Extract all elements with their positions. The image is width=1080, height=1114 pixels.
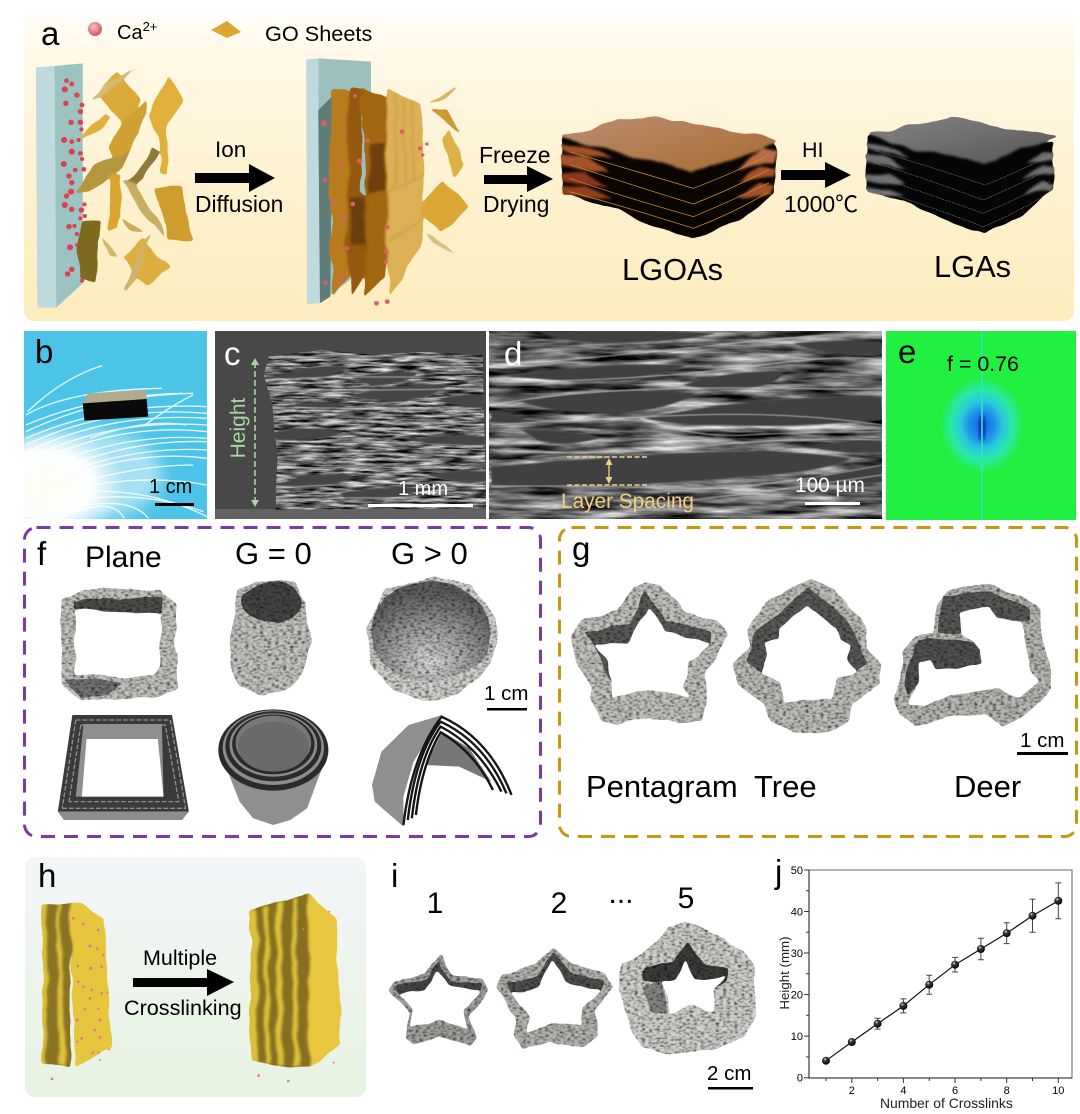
y tick labels: 0	[797, 1073, 803, 1085]
label g: g	[572, 530, 590, 567]
label Ion: Ion	[215, 137, 246, 162]
label LGAs: LGAs	[934, 249, 1011, 284]
y tick labels: 20	[791, 990, 803, 1002]
stack after crosslinking	[249, 893, 342, 1082]
FFT streak	[981, 331, 983, 520]
panel h: multiple crosslinking	[25, 857, 366, 1097]
label HI: HI	[802, 138, 824, 162]
panel i: stars after crosslink cycles	[388, 857, 755, 1090]
y tick labels: 50	[791, 865, 803, 877]
legend: calcium ion	[88, 19, 157, 44]
panel a background	[24, 10, 1074, 321]
label b: b	[35, 333, 53, 370]
scale text 1 cm: 1 cm	[1020, 729, 1064, 752]
label f value: f = 0.76	[947, 352, 1019, 376]
label ellipsis: ...	[608, 877, 634, 910]
sky background	[24, 331, 207, 519]
SEM background	[215, 331, 486, 519]
photo: pentagram ring	[570, 582, 727, 723]
label Freeze: Freeze	[479, 142, 551, 168]
stack: LGOAs	[559, 116, 778, 239]
scale bar	[368, 504, 473, 507]
arrow: ion diffusion	[195, 164, 275, 192]
x axis title: Number of Crosslinks	[880, 1095, 1013, 1111]
photo: tree ring	[734, 580, 881, 732]
label 1000 C: 1000℃	[784, 191, 858, 217]
photo: star after 5 cycles	[617, 923, 755, 1055]
label Pentagram: Pentagram	[586, 769, 738, 804]
panel e: FFT orientation map	[886, 331, 1076, 520]
height arrow	[251, 358, 259, 507]
legend: calcium ion: 2+	[143, 19, 157, 34]
label 2: 2	[551, 887, 567, 920]
label c: c	[224, 335, 240, 372]
FFT green field	[886, 331, 1076, 520]
label Drying: Drying	[483, 191, 549, 217]
panel f: shapes of different curvature	[24, 528, 540, 836]
legend: GO sheet: GO Sheets	[265, 21, 372, 46]
label 5: 5	[678, 882, 694, 915]
label Crosslinking: Crosslinking	[124, 995, 242, 1020]
diagram: ions crosslinking GO sheets on the wall	[306, 58, 468, 306]
scale text 100 um: 100 µm	[795, 474, 865, 497]
label G = 0: G = 0	[235, 536, 312, 571]
panel j: height vs crosslinks chart	[774, 853, 1072, 1111]
label 1: 1	[427, 887, 443, 920]
panel c: SEM cross section	[215, 331, 490, 519]
diagram: wall with free ions and GO sheets	[36, 63, 192, 308]
model: cylinder	[218, 709, 328, 825]
scale text 1 cm: 1 cm	[484, 682, 528, 705]
scale text 1 cm: 1 cm	[149, 476, 192, 498]
dashed frame	[24, 528, 540, 836]
scale bar	[155, 503, 194, 506]
legend: GO sheet	[211, 21, 372, 46]
panel g: complex outlines	[560, 528, 1076, 836]
label i: i	[391, 857, 398, 894]
axes and ticks	[804, 870, 1072, 1083]
y axis title: Height (mm)	[777, 936, 792, 1010]
data line	[826, 901, 1058, 1061]
y tick labels: 30	[791, 948, 803, 960]
x tick labels: 4	[900, 1085, 906, 1097]
label G > 0: G > 0	[391, 536, 468, 571]
label e: e	[898, 333, 916, 370]
label LGOAs: LGOAs	[622, 252, 723, 287]
model: bowl	[372, 715, 511, 827]
label a: a	[41, 15, 60, 52]
photo: square frame	[61, 588, 177, 700]
arrow: HI 1000 C	[781, 162, 851, 188]
FFT halo	[940, 377, 1024, 473]
photo: deer ring	[895, 583, 1052, 727]
plot frame	[809, 870, 1072, 1078]
dark pores and bright edges	[491, 330, 914, 505]
scale bar	[805, 502, 860, 505]
data markers	[822, 897, 1062, 1065]
x tick labels: 2	[849, 1085, 855, 1097]
scale bar	[487, 708, 527, 710]
arrow: multiple crosslinking	[133, 969, 234, 996]
label f: f	[37, 535, 47, 572]
layered specimen	[262, 348, 490, 512]
label Tree: Tree	[754, 769, 817, 804]
aerogel block	[83, 390, 148, 421]
y tick labels: 40	[791, 906, 803, 918]
panel d: SEM layered detail	[489, 330, 914, 519]
label Diffusion: Diffusion	[195, 191, 283, 217]
substrate strip	[215, 509, 486, 519]
photo: star after 1 cycle	[388, 955, 488, 1047]
stack: LGAs	[864, 117, 1057, 234]
layer spacing marker	[567, 457, 649, 485]
x tick labels: 6	[952, 1085, 958, 1097]
scale bar	[1017, 752, 1068, 755]
stack before crosslinking	[42, 902, 110, 1080]
panel a: fabrication process	[24, 10, 1074, 321]
label Deer: Deer	[954, 769, 1021, 804]
label Multiple: Multiple	[143, 946, 217, 970]
x tick labels: 8	[1004, 1085, 1010, 1097]
FFT core	[979, 415, 985, 441]
dashed frame	[560, 528, 1076, 836]
label d: d	[504, 335, 522, 372]
scale text 2 cm: 2 cm	[707, 1062, 751, 1085]
scale bar	[708, 1087, 753, 1090]
photo: bowl	[365, 577, 498, 702]
feather	[24, 365, 207, 519]
SEM texture	[489, 331, 882, 519]
model: square frame	[58, 715, 189, 820]
legend: calcium ion: Ca	[117, 22, 143, 44]
y tick labels	[791, 865, 803, 1085]
scale text 1 mm: 1 mm	[398, 478, 448, 500]
arrow: freeze drying	[484, 166, 553, 192]
panel h background	[25, 857, 366, 1097]
label Layer Spacing: Layer Spacing	[561, 490, 694, 513]
label j: j	[774, 853, 782, 890]
photo: star after 2 cycles	[497, 947, 612, 1050]
y tick labels: 10	[791, 1031, 803, 1043]
label h: h	[38, 857, 56, 894]
photo: cylinder	[230, 580, 311, 695]
error bars	[875, 883, 1061, 1029]
x tick labels	[849, 1085, 1064, 1097]
label Plane: Plane	[85, 541, 162, 574]
label Height: Height	[227, 397, 250, 458]
panel b: aerogel on feather	[24, 331, 207, 519]
x tick labels: 10	[1052, 1085, 1064, 1097]
